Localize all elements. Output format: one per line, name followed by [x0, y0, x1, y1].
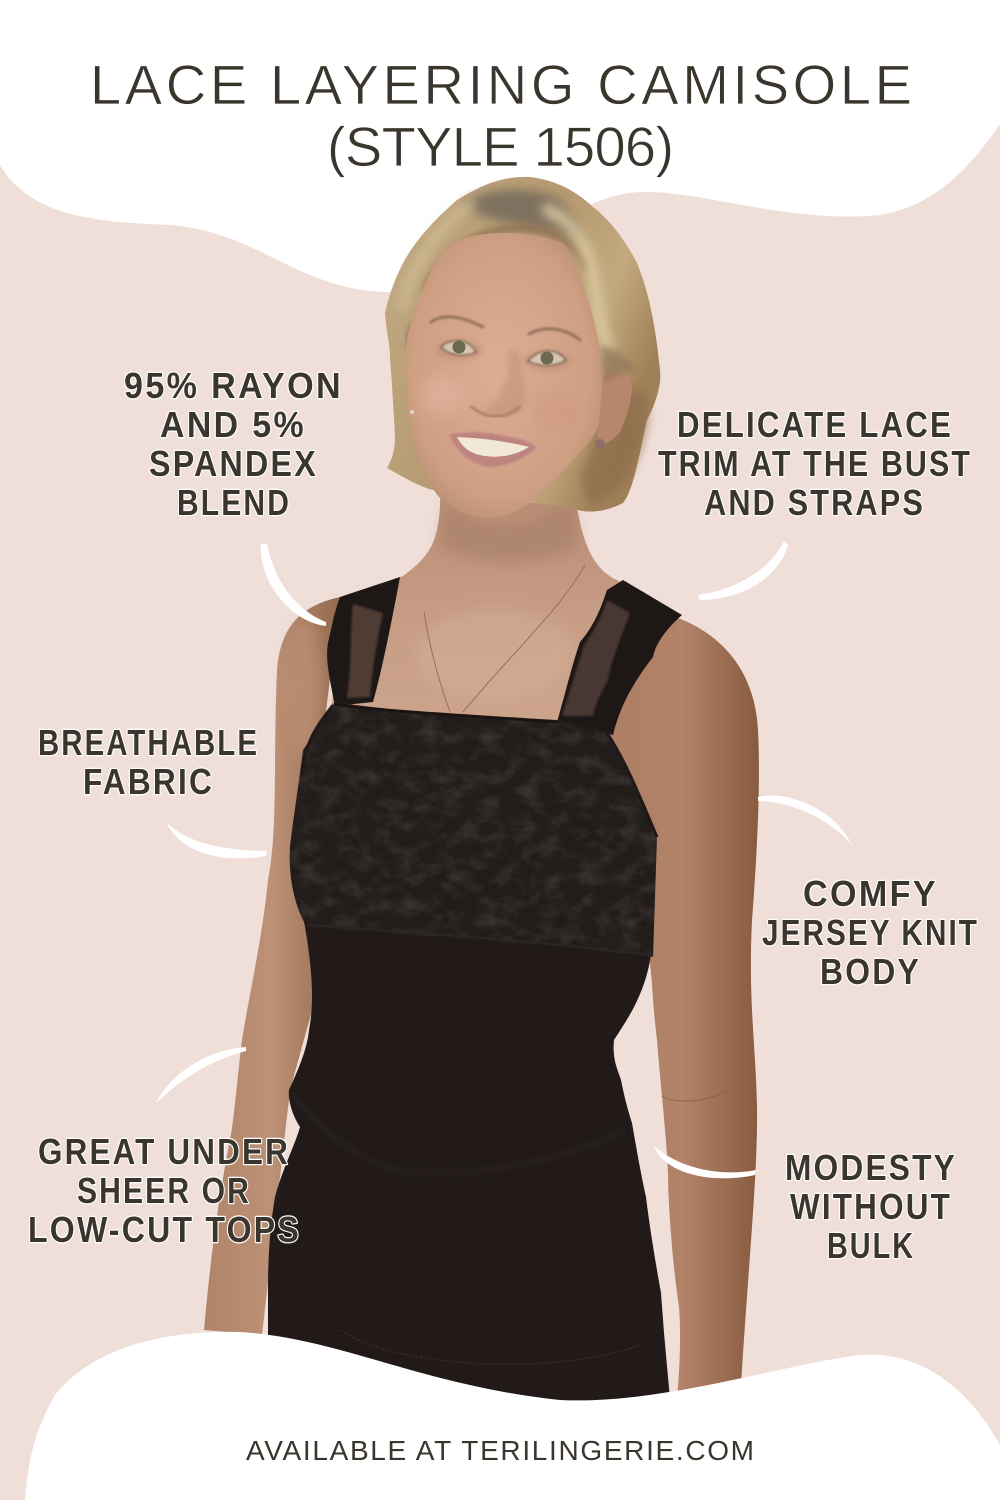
shoulder highlight left [287, 620, 323, 760]
right arm [590, 612, 759, 1396]
left arm [204, 597, 340, 1335]
label: breathable fabric: FABRIC [83, 761, 214, 802]
neck shadow [440, 500, 578, 562]
cheek blush [420, 375, 580, 432]
nose [471, 350, 525, 416]
teeth [457, 437, 529, 457]
right cheek [530, 388, 580, 432]
lips [449, 432, 537, 467]
nose shadow [480, 350, 525, 416]
scalloped trim [335, 704, 557, 722]
curve: jersey [758, 796, 852, 845]
right eye [528, 351, 566, 365]
waist fold [292, 1095, 625, 1173]
label: rayon blend: 95% RAYON [124, 365, 343, 406]
hem stitching [340, 1330, 640, 1364]
hair above ear [602, 345, 635, 382]
collarbone highlight [415, 610, 575, 700]
label: rayon blend: BLEND [177, 482, 291, 523]
brows [431, 317, 580, 340]
left lace strap [327, 577, 400, 706]
label: modesty: MODESTY [785, 1147, 957, 1188]
eyes [435, 340, 571, 371]
right scalloped trim [607, 733, 657, 837]
left cheek [420, 375, 464, 415]
hair front shadow [425, 228, 588, 290]
curve: rayon [261, 544, 326, 626]
hair left highlight [402, 205, 470, 305]
label: rayon blend: SPANDEX [149, 443, 318, 484]
curve: lace trim [698, 541, 788, 600]
left eye socket [435, 340, 483, 360]
label: modesty [785, 1147, 957, 1266]
label: delicate lace [658, 404, 972, 523]
band seam [308, 925, 653, 955]
label: jersey knit: BODY [820, 951, 921, 992]
label: breathable fabric [38, 722, 259, 802]
right strap sheer lace [562, 600, 630, 716]
camisole body [268, 900, 671, 1410]
left iris [452, 340, 466, 354]
camisole [268, 577, 682, 1410]
necklace [424, 565, 585, 712]
hair shadow by temple [407, 320, 418, 358]
neck and chest [330, 470, 640, 735]
right iris [540, 352, 554, 364]
label: delicate lace: DELICATE LACE [677, 404, 953, 445]
woman figure [204, 177, 759, 1410]
face [405, 233, 605, 518]
title: LACE LAYERING CAMISOLE [90, 53, 912, 116]
hair mass [385, 177, 660, 512]
left earring [410, 410, 414, 414]
label: delicate lace: AND STRAPS [704, 482, 925, 523]
label: jersey knit [762, 873, 979, 992]
label: modesty: WITHOUT [790, 1186, 952, 1227]
curve: modesty [654, 1146, 756, 1178]
bottom white wave [25, 1332, 1000, 1500]
lace bust panel [290, 702, 657, 957]
lace texture [285, 700, 660, 962]
top white wave [0, 0, 1000, 292]
curve: under tops [156, 1047, 246, 1103]
label: great under tops: GREAT UNDER [38, 1131, 290, 1172]
label: breathable fabric: BREATHABLE [38, 722, 259, 763]
label: great under tops [28, 1131, 301, 1250]
label: jersey knit: COMFY [803, 873, 938, 914]
hair grey roots [462, 189, 585, 245]
footer: AVAILABLE AT TERILINGERIE.COM [246, 1435, 754, 1466]
label: rayon blend: AND 5% [160, 404, 306, 445]
ear [597, 373, 632, 444]
title: (STYLE 1506) [327, 115, 674, 178]
right eye socket [523, 351, 571, 371]
label: rayon blend [124, 365, 343, 523]
hair right lower shadow [580, 387, 648, 505]
earring [595, 439, 605, 449]
nose underside [471, 407, 520, 416]
label: great under tops: LOW-CUT TOPS [28, 1209, 301, 1250]
title [90, 53, 912, 178]
left strap sheer lace [347, 604, 383, 698]
label: modesty: BULK [827, 1225, 915, 1266]
curve: breathable [166, 822, 267, 858]
label: great under tops: SHEER OR [77, 1170, 251, 1211]
left eye [441, 341, 476, 355]
arm crease [662, 1090, 730, 1101]
right lace strap [557, 580, 682, 735]
hair highlight swoop [548, 210, 608, 345]
mouth [449, 432, 537, 467]
left scalloped trim [302, 705, 333, 775]
